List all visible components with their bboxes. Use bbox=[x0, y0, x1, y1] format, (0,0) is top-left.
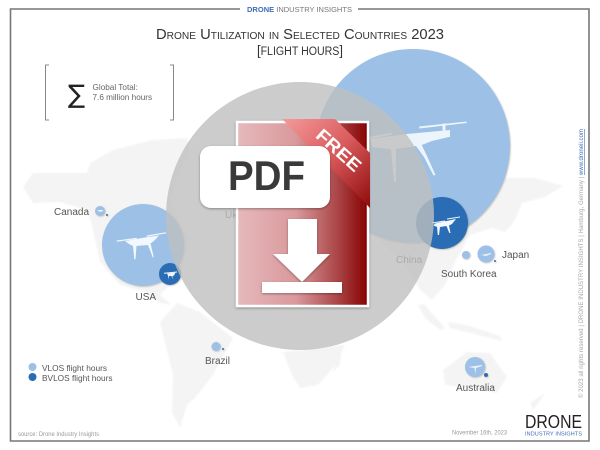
download bar bbox=[262, 282, 342, 293]
legend: bvlos dot bbox=[28, 373, 36, 381]
pdf label text: PDF bbox=[228, 152, 305, 199]
callout: global total bbox=[46, 65, 174, 120]
bubble: south korea bbox=[462, 251, 470, 259]
icon: sigma: ∑ bbox=[68, 80, 85, 110]
legend: vlos dot bbox=[28, 363, 36, 371]
label: australia: Australia bbox=[456, 383, 495, 394]
text: global total value: 7.6 million hours bbox=[92, 93, 152, 102]
map: eurasia bbox=[380, 140, 563, 300]
map: madagascar bbox=[333, 348, 342, 372]
source: source: Drone Industry Insights bbox=[18, 432, 99, 438]
icon: drone usa VLOS bbox=[117, 232, 166, 259]
legend bbox=[28, 363, 113, 383]
subtitle: [FLIGHT HOURS] bbox=[257, 42, 343, 58]
title: Drone Utilization in Selected Countries 2023 bbox=[156, 27, 444, 43]
map: north america bbox=[23, 138, 190, 305]
ribbon: free bbox=[282, 119, 370, 208]
bubble: usa BVLOS bbox=[159, 263, 181, 285]
label: ukraine: Ukraine bbox=[225, 210, 260, 221]
label: brazil: Brazil bbox=[205, 356, 230, 367]
date: November 16th, 2023 bbox=[452, 430, 508, 436]
overlay: grey circle bbox=[166, 82, 434, 350]
bubble: usa VLOS bbox=[102, 204, 184, 286]
world map bbox=[23, 138, 563, 428]
label: usa: USA bbox=[136, 292, 156, 303]
icon: drone china BVLOS bbox=[432, 216, 460, 235]
bubble: canada bbox=[95, 206, 108, 216]
download arrow bbox=[273, 219, 330, 282]
text: global total: Global Total: bbox=[92, 83, 138, 92]
logo bbox=[525, 411, 582, 438]
label: canada: Canada bbox=[54, 207, 89, 218]
icon: drone usa BVLOS bbox=[164, 272, 177, 280]
icon: drone china VLOS bbox=[360, 122, 467, 182]
bubble: china BVLOS bbox=[416, 197, 468, 249]
map: south america bbox=[160, 303, 233, 428]
bracket: right bbox=[170, 65, 174, 120]
map: africa bbox=[283, 345, 345, 388]
bubble: china VLOS bbox=[316, 49, 510, 243]
logo: drone: DRONE bbox=[525, 411, 582, 432]
pdf page bbox=[237, 122, 368, 306]
map: south east asia islands bbox=[418, 304, 445, 330]
map: indonesia and new guinea bbox=[448, 322, 502, 341]
bracket: left bbox=[46, 65, 49, 120]
map: new zealand bbox=[530, 393, 545, 410]
label: south korea: South Korea bbox=[441, 269, 497, 280]
icon: pdf download bbox=[200, 119, 370, 306]
header brand: DRONE INDUSTRY INSIGHTS bbox=[247, 5, 352, 14]
map: australia bbox=[443, 352, 507, 393]
legend: bvlos label: BVLOS flight hours bbox=[42, 373, 113, 383]
bubble: japan bbox=[478, 246, 496, 262]
ribbon text: FREE bbox=[312, 125, 365, 176]
bubble: brazil bbox=[212, 342, 224, 351]
bubble: australia bbox=[465, 357, 488, 377]
pdf label bbox=[200, 146, 330, 208]
logo: industry insights: INDUSTRY INSIGHTS bbox=[525, 432, 582, 438]
label: china: China bbox=[396, 255, 423, 266]
label: japan: Japan bbox=[502, 250, 529, 261]
copyright vertical text: © 2023 all rights reserved | DRONE INDUSTRY INSIGHTS | Hamburg, Germany | www.droneii.com bbox=[578, 129, 585, 398]
legend: vlos label: VLOS flight hours bbox=[42, 363, 107, 373]
